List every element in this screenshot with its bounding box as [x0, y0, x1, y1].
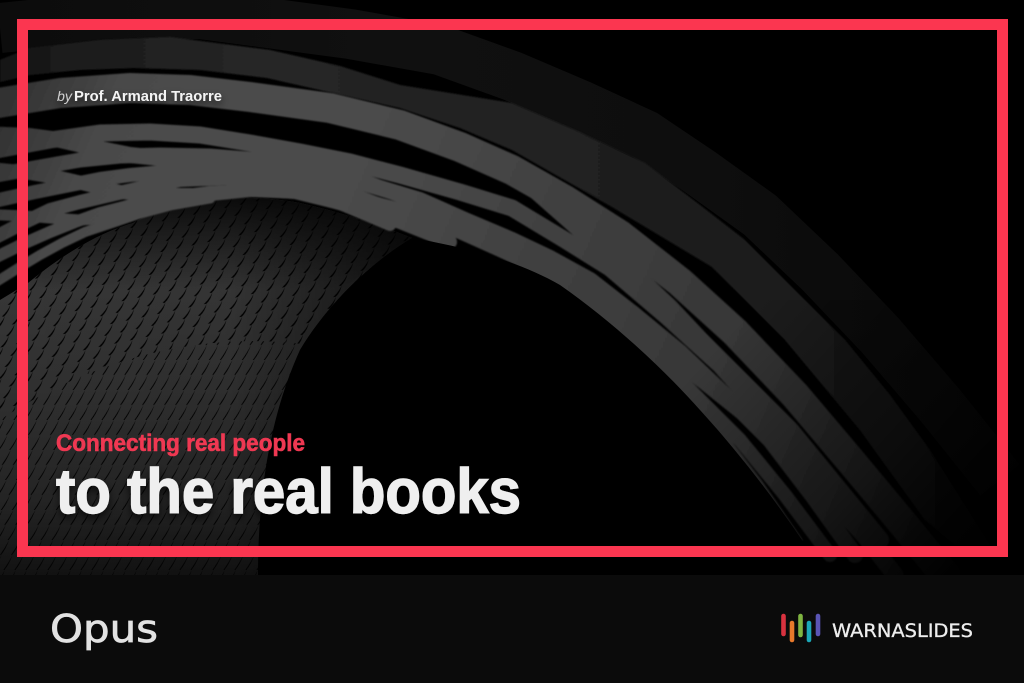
central black void: [258, 238, 825, 575]
crossing strand: [530, 185, 880, 540]
logo wordmark: WARNASLIDES: [832, 621, 973, 642]
subtitle: Connecting real people: [56, 430, 305, 457]
brand name: Opus: Opus: [50, 607, 158, 651]
main bright ribbon: [0, 88, 945, 575]
ribbon 2: [0, 132, 895, 575]
lower right fade to black: [726, 372, 990, 575]
red frame: [22, 24, 1002, 552]
thin strand: [512, 262, 802, 540]
author byline: Prof. Armand Traorre: [74, 88, 222, 105]
ribbon 5: [0, 170, 830, 555]
woven ribbons: [0, 88, 945, 575]
ribbon 9: [0, 198, 210, 220]
icon: Warnaslides logo bars: [784, 616, 818, 640]
title: to the real books: [56, 457, 521, 527]
outermost dim band: [0, 0, 897, 370]
ribbon 3: [0, 134, 855, 555]
ribbon 8: [0, 190, 390, 265]
ribbon 7: [0, 178, 430, 245]
ribbon 10: [0, 218, 140, 286]
upper dark band: [0, 36, 935, 494]
footer bar: [0, 575, 1024, 683]
ribbon 6: [0, 168, 450, 242]
ribbon 4: [0, 155, 885, 560]
author byline: by: [57, 88, 73, 104]
fine mesh: [0, 198, 412, 575]
